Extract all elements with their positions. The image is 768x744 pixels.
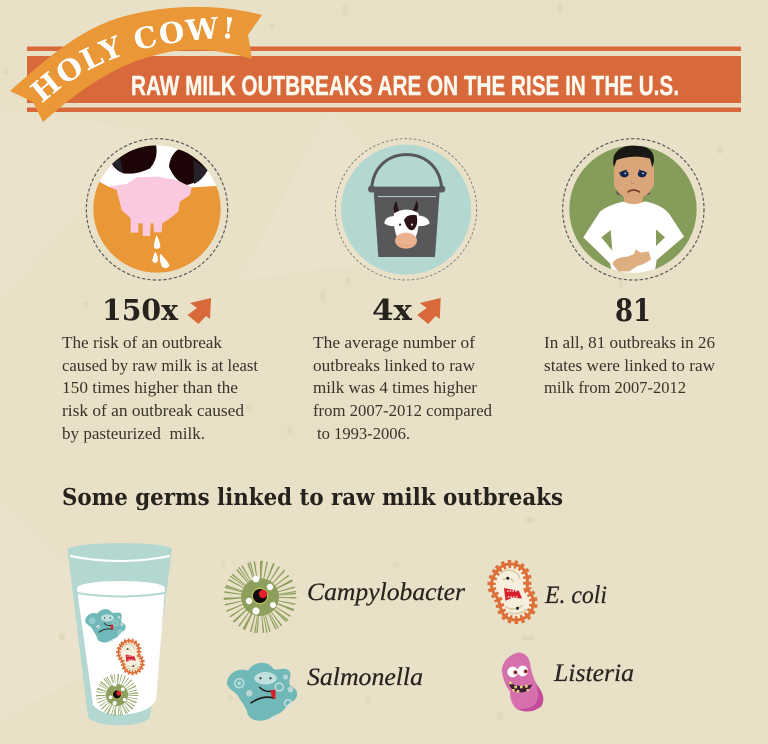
text block: 150 times higher than the <box>62 378 238 397</box>
ribbon: holy cow <box>10 6 262 122</box>
text block: states were linked to raw <box>544 356 716 375</box>
label: E. coli <box>544 582 607 609</box>
text block: risk of an outbreak caused <box>62 401 245 420</box>
text block: The average number of <box>313 333 475 352</box>
icon: milk bucket <box>335 139 477 280</box>
number: 4x <box>372 293 413 327</box>
text block <box>313 333 492 443</box>
icon: cow udder <box>83 139 230 280</box>
number: 81 <box>615 293 651 329</box>
germ: listeria <box>502 652 634 712</box>
number: 150x <box>102 293 179 327</box>
text block: The risk of an outbreak <box>62 333 222 352</box>
text block <box>62 333 258 443</box>
text block: milk was 4 times higher <box>313 378 477 397</box>
text block: milk from 2007-2012 <box>544 378 686 397</box>
icon: glass of milk <box>68 543 172 725</box>
text block: caused by raw milk is at least <box>62 356 258 375</box>
banner <box>27 46 741 112</box>
text block: to 1993-2006. <box>317 424 410 443</box>
panel: 4x <box>313 139 492 443</box>
germ: salmonella <box>227 663 423 721</box>
icon: arrow up <box>188 298 211 324</box>
germ: campylobacter <box>237 574 465 620</box>
text block: In all, 81 outbreaks in 26 <box>544 333 715 352</box>
text block <box>544 333 716 397</box>
ribbon heading: HOLY COW! <box>29 16 232 103</box>
panel: 81 <box>544 139 716 397</box>
text block: from 2007-2012 compared <box>313 401 492 420</box>
germ: e. coli <box>492 564 607 620</box>
label: Salmonella <box>307 664 423 691</box>
text block: outbreaks linked to raw <box>313 356 476 375</box>
label: Listeria <box>553 660 634 687</box>
icon: arrow up <box>417 298 441 324</box>
icon: sick man <box>563 139 704 280</box>
label: Campylobacter <box>307 579 465 606</box>
text block: by pasteurized milk. <box>62 424 205 443</box>
heading: germs: Some germs linked to raw milk outbreaks <box>62 484 563 511</box>
panel: 150x <box>62 139 258 443</box>
